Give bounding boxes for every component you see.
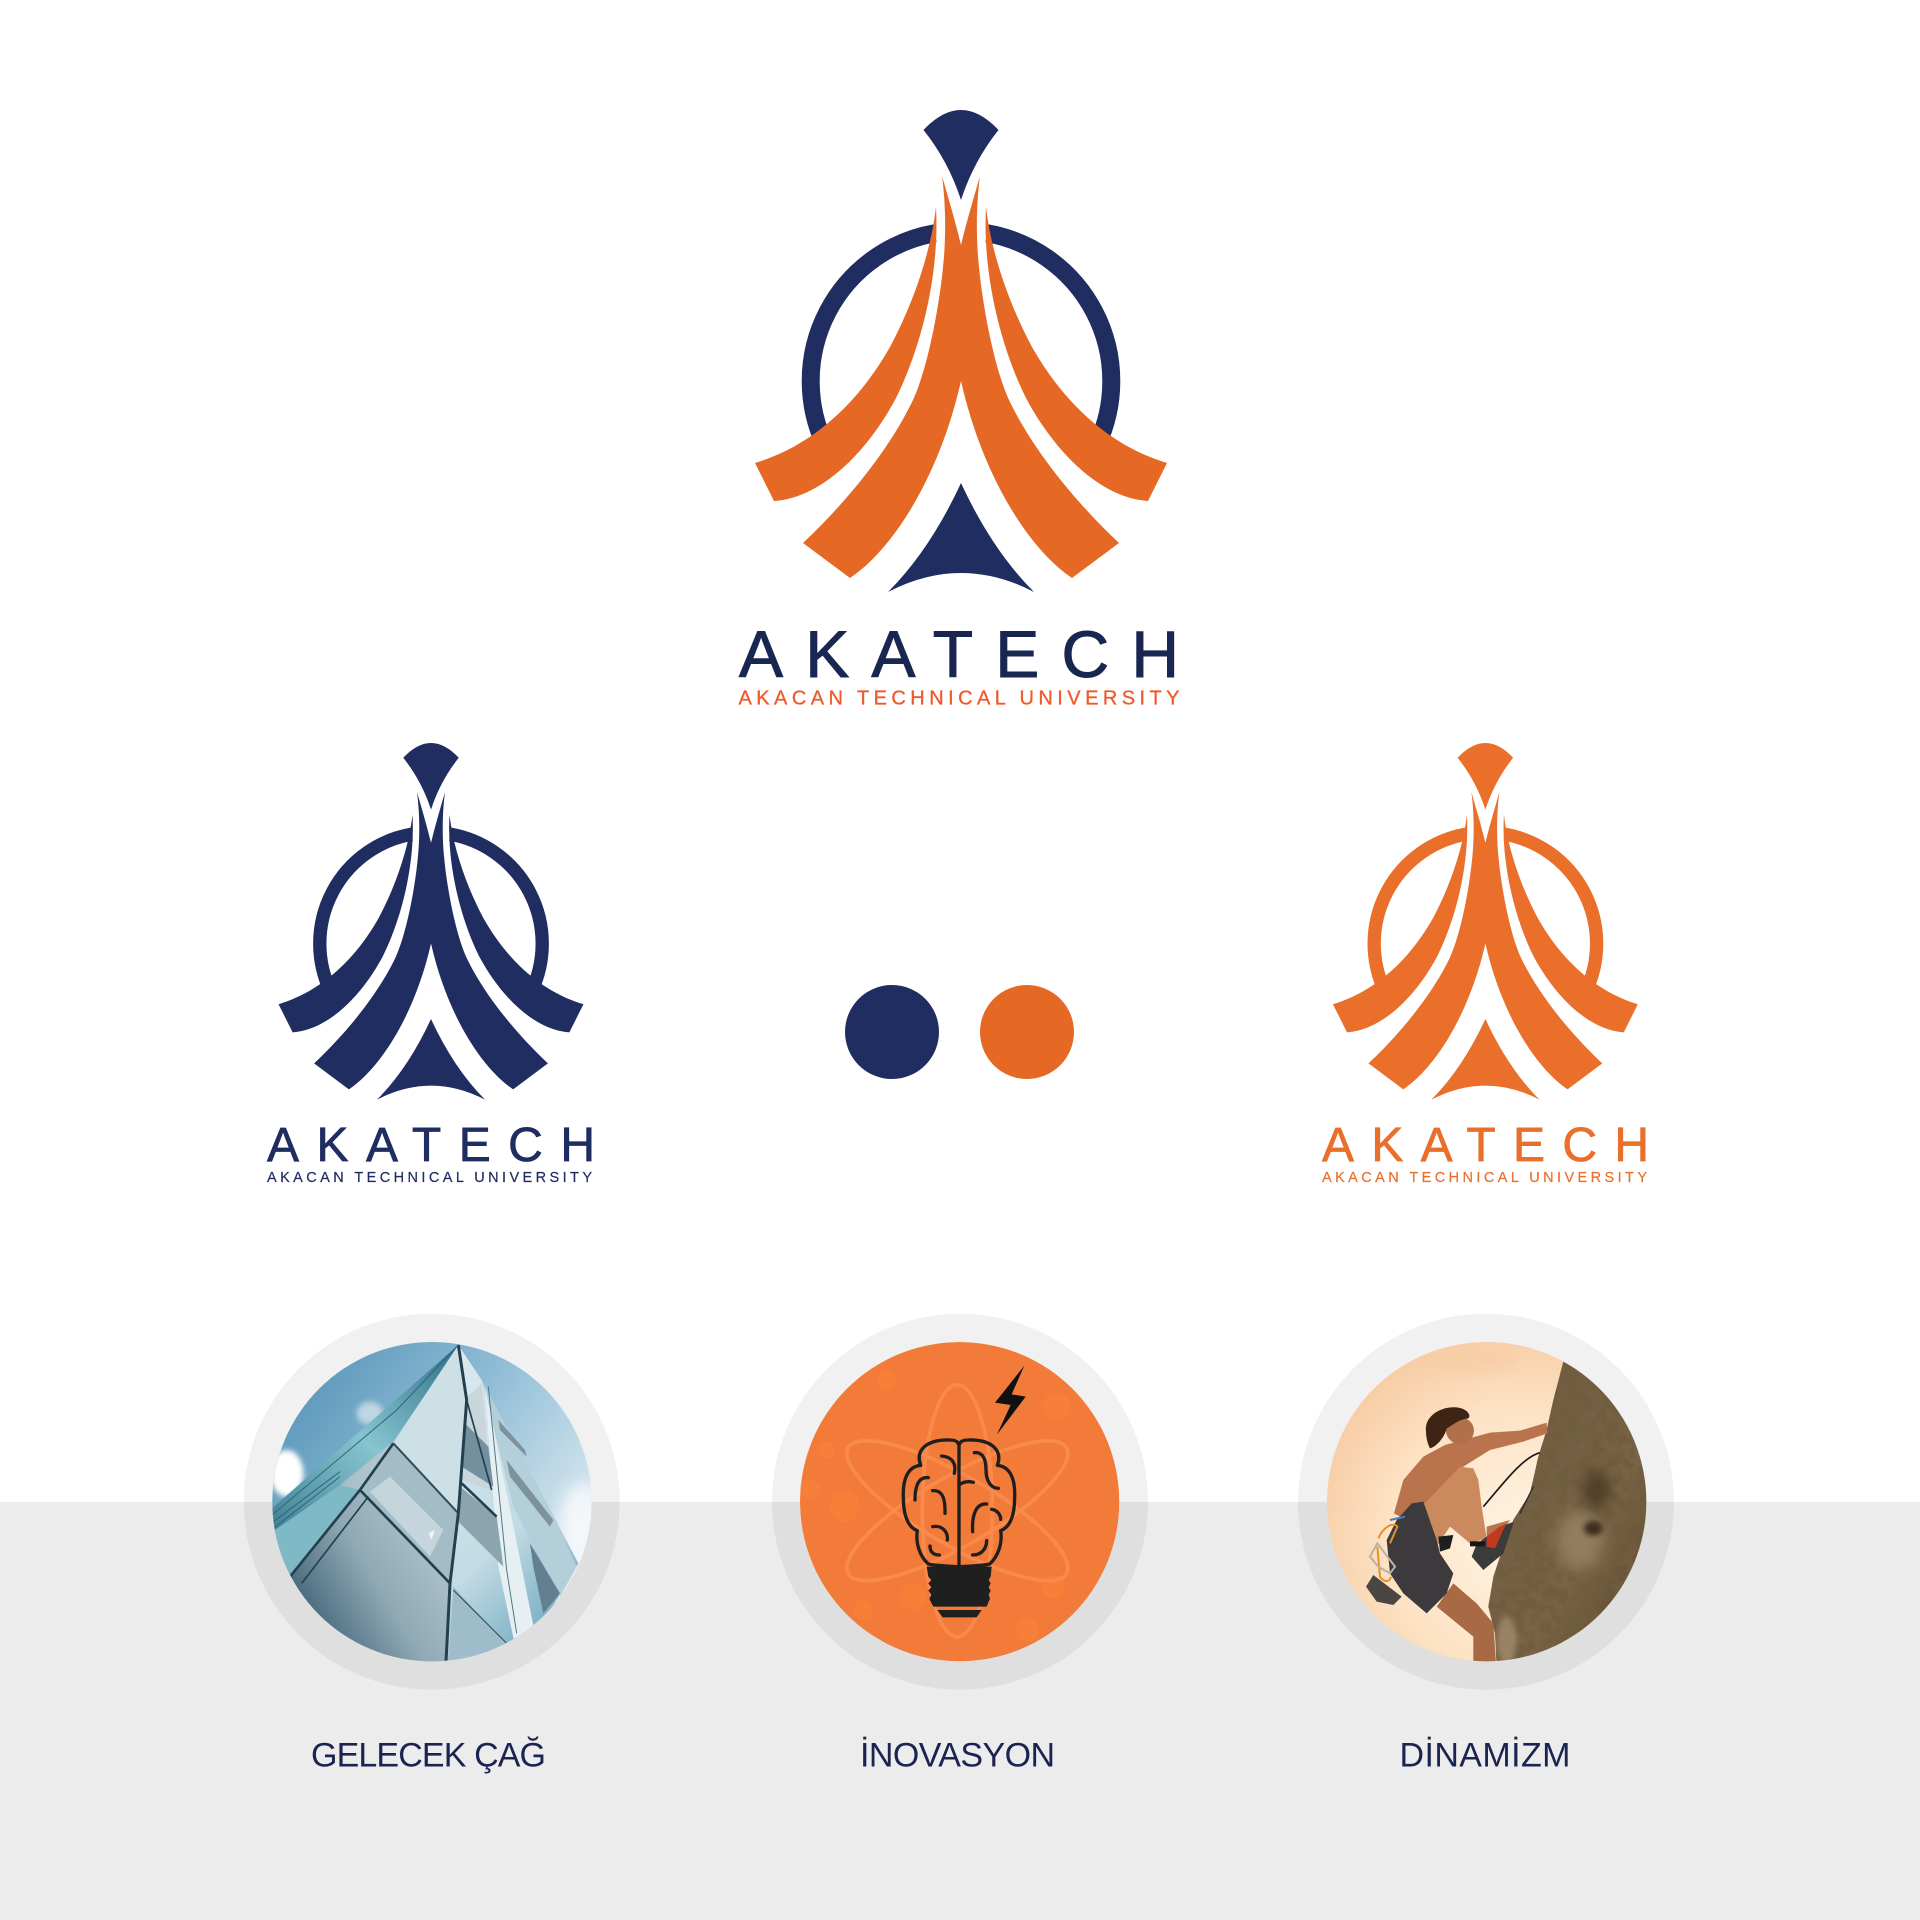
logo symbol: navy [279, 743, 583, 1100]
swatch: orange [980, 985, 1074, 1079]
background band [0, 1502, 1920, 1920]
tagline: navy: AKACAN TECHNICAL UNIVERSITY [267, 1170, 592, 1186]
halo ring [772, 1314, 1148, 1690]
label: DİNAMİZM [1400, 1736, 1570, 1774]
colour swatches [845, 985, 1074, 1079]
panel: Gelecek Çağ [244, 1314, 620, 1774]
label: İNOVASYON [860, 1736, 1055, 1774]
logo symbol: orange [1333, 743, 1638, 1100]
tagline: Akacan Technical University: AKACAN TECHNICAL UNIVERSITY [738, 688, 1180, 710]
swatch: navy [845, 985, 939, 1079]
photo: rock climber [1323, 1340, 1657, 1665]
photo: glass building [270, 1340, 607, 1667]
main logo: colour [738, 110, 1180, 710]
logo variant: navy [267, 743, 595, 1186]
label: GELECEK ÇAĞ [311, 1736, 546, 1774]
logo symbol: colour [755, 110, 1167, 592]
panel: İnovasyon [772, 1314, 1148, 1774]
tagline: orange: AKACAN TECHNICAL UNIVERSITY [1322, 1170, 1647, 1186]
icon: brain bulb on orange disc [800, 1342, 1119, 1661]
wordmark: AKATECH navy: AKATECH [267, 1119, 595, 1172]
halo ring [1298, 1314, 1674, 1690]
halo ring [244, 1314, 620, 1690]
logo variant: orange [1322, 743, 1649, 1186]
wordmark: AKATECH: AKATECH [739, 617, 1179, 691]
panel: Dinamizm [1298, 1314, 1674, 1774]
wordmark: AKATECH orange: AKATECH [1322, 1119, 1649, 1172]
